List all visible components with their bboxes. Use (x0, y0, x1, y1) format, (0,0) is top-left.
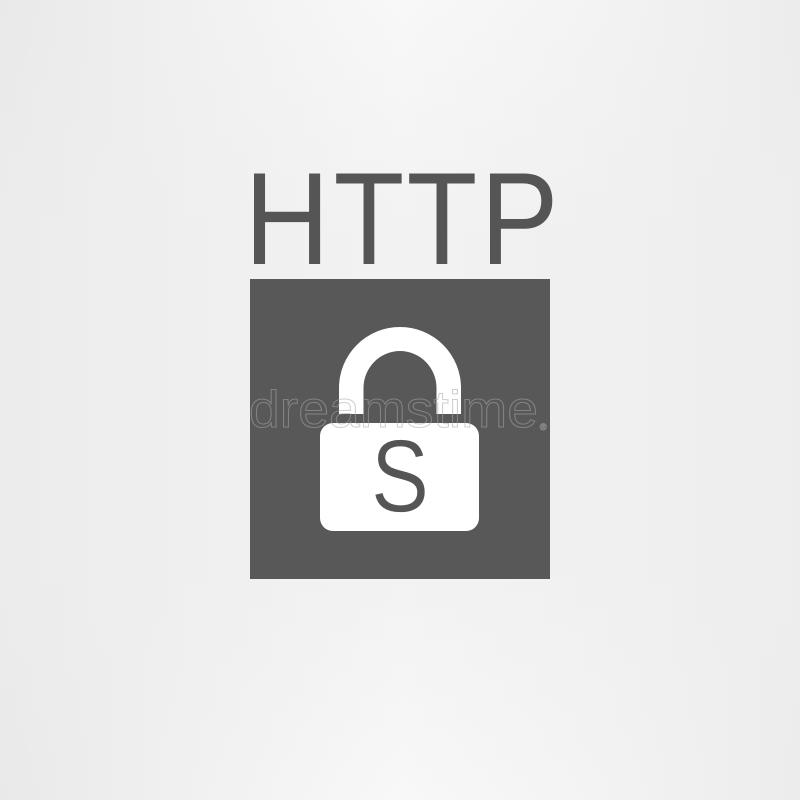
heading: HTTP: T (407, 146, 477, 293)
padlock shackle (339, 327, 461, 414)
watermark: dreamstime (249, 381, 538, 439)
heading: HTTP: P (480, 146, 558, 293)
heading: HTTP (244, 145, 558, 293)
heading: HTTP: T (334, 146, 404, 293)
padlock body (320, 423, 479, 531)
letter S on padlock: S (371, 420, 429, 534)
dark square panel (250, 279, 550, 579)
icon: padlock (320, 327, 479, 534)
heading: HTTP: H (244, 145, 330, 292)
watermark: ® (540, 422, 547, 432)
